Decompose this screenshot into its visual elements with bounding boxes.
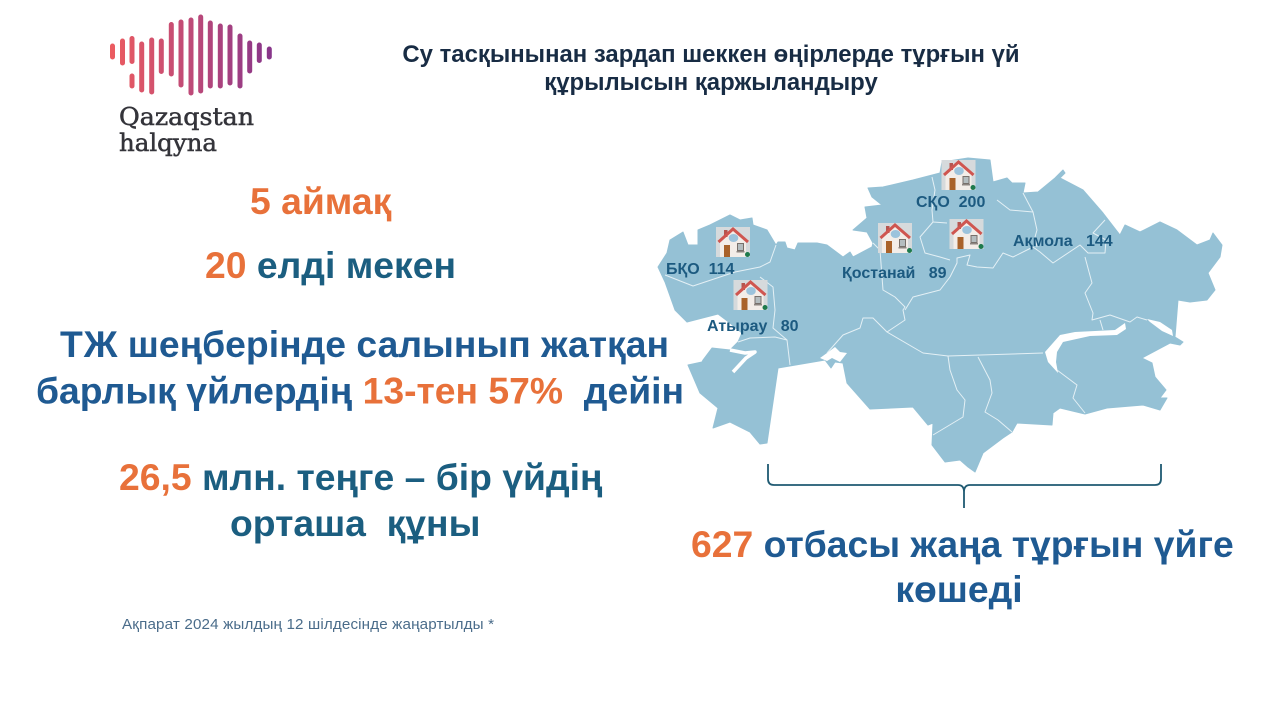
logo: Qazaqstan halqyna xyxy=(112,17,269,157)
marker: Қостанай xyxy=(842,223,947,282)
logo wordmark xyxy=(119,103,254,157)
stat: average house cost: 26,5 млн. теңге – бір үйдің xyxy=(119,456,603,498)
marker: Ақмола: Ақмола 144 xyxy=(1013,233,1113,250)
marker: СҚО xyxy=(916,160,985,211)
stat: 627 families xyxy=(691,523,1234,610)
marker: БҚО: БҚО 114 xyxy=(666,261,735,278)
marker: СҚО: СҚО 200 xyxy=(916,194,985,211)
stat: share of all houses xyxy=(36,323,684,412)
marker: Қостанай: Қостанай 89 xyxy=(842,265,947,282)
lakes and seas xyxy=(820,319,1173,373)
region borders xyxy=(665,177,1147,435)
stat: 20 settlements: 20 елді мекен xyxy=(205,244,456,286)
map landmass xyxy=(658,158,1222,472)
marker: БҚО xyxy=(666,227,750,278)
Kara-Bogaz inlet xyxy=(730,350,755,372)
stat: 627 families: 627 отбасы жаңа тұрғын үйге xyxy=(691,523,1234,565)
stat: share of all houses: ТЖ шеңберінде салынып жатқан xyxy=(60,323,669,365)
title xyxy=(402,41,1020,96)
logo wordmark: Qazaqstan xyxy=(119,103,254,131)
stat: share of all houses: барлық үйлердің 13-тен 57% дейін xyxy=(36,370,684,412)
logo sound-wave bars xyxy=(112,17,269,93)
marker: Ақмола xyxy=(950,219,1113,250)
stat: average house cost xyxy=(119,456,603,544)
stat: average house cost: орташа құны xyxy=(230,502,480,544)
logo wordmark: halqyna xyxy=(119,129,217,157)
stat: 5 regions: 5 аймақ xyxy=(250,180,392,222)
footnote: Ақпарат 2024 жылдың 12 шілдесінде жаңартылды * xyxy=(122,616,494,633)
marker: Атырау xyxy=(707,280,799,335)
title: құрылысын қаржыландыру xyxy=(544,69,878,96)
stat: 627 families: көшеді xyxy=(895,568,1023,610)
map of Kazakhstan xyxy=(658,158,1222,472)
brace under map xyxy=(768,464,1161,508)
marker: Атырау: Атырау 80 xyxy=(707,318,799,335)
title: Су тасқынынан зардап шеккен өңірлерде тұрғын үй xyxy=(402,41,1020,68)
